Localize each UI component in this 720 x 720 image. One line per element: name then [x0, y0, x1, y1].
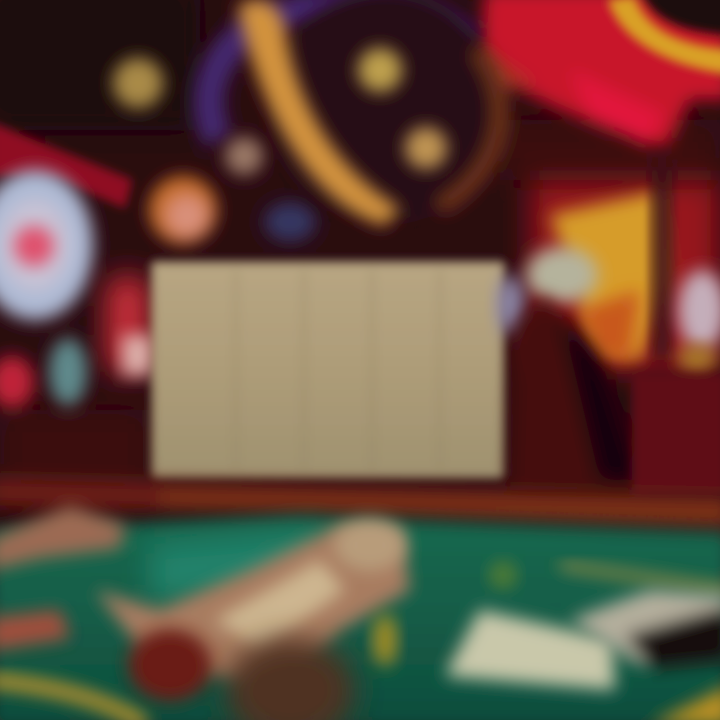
- target dartboard left: [0, 122, 152, 408]
- yellow curved table line bottom left: [0, 680, 720, 720]
- dark sleeve right: [570, 590, 720, 668]
- purple arc: [209, 4, 470, 140]
- white papers: [445, 610, 615, 690]
- green table floor: [0, 516, 720, 720]
- panel column shading: [232, 270, 444, 470]
- glowing dots: [113, 48, 447, 242]
- yellow crescent top right corner: [608, 0, 720, 74]
- hand left: [0, 505, 125, 650]
- red fan shape top right: [475, 0, 720, 150]
- orange crescent: [238, 0, 400, 226]
- central hand and arm: [95, 519, 410, 720]
- orange ball: [149, 176, 217, 244]
- beige central panel: [152, 262, 504, 478]
- dark figure and red cabinet: [510, 295, 720, 494]
- dark disc with brown ring: [270, 0, 501, 220]
- right side yellow and red artwork: [496, 150, 720, 372]
- red skirting strip: [0, 478, 720, 530]
